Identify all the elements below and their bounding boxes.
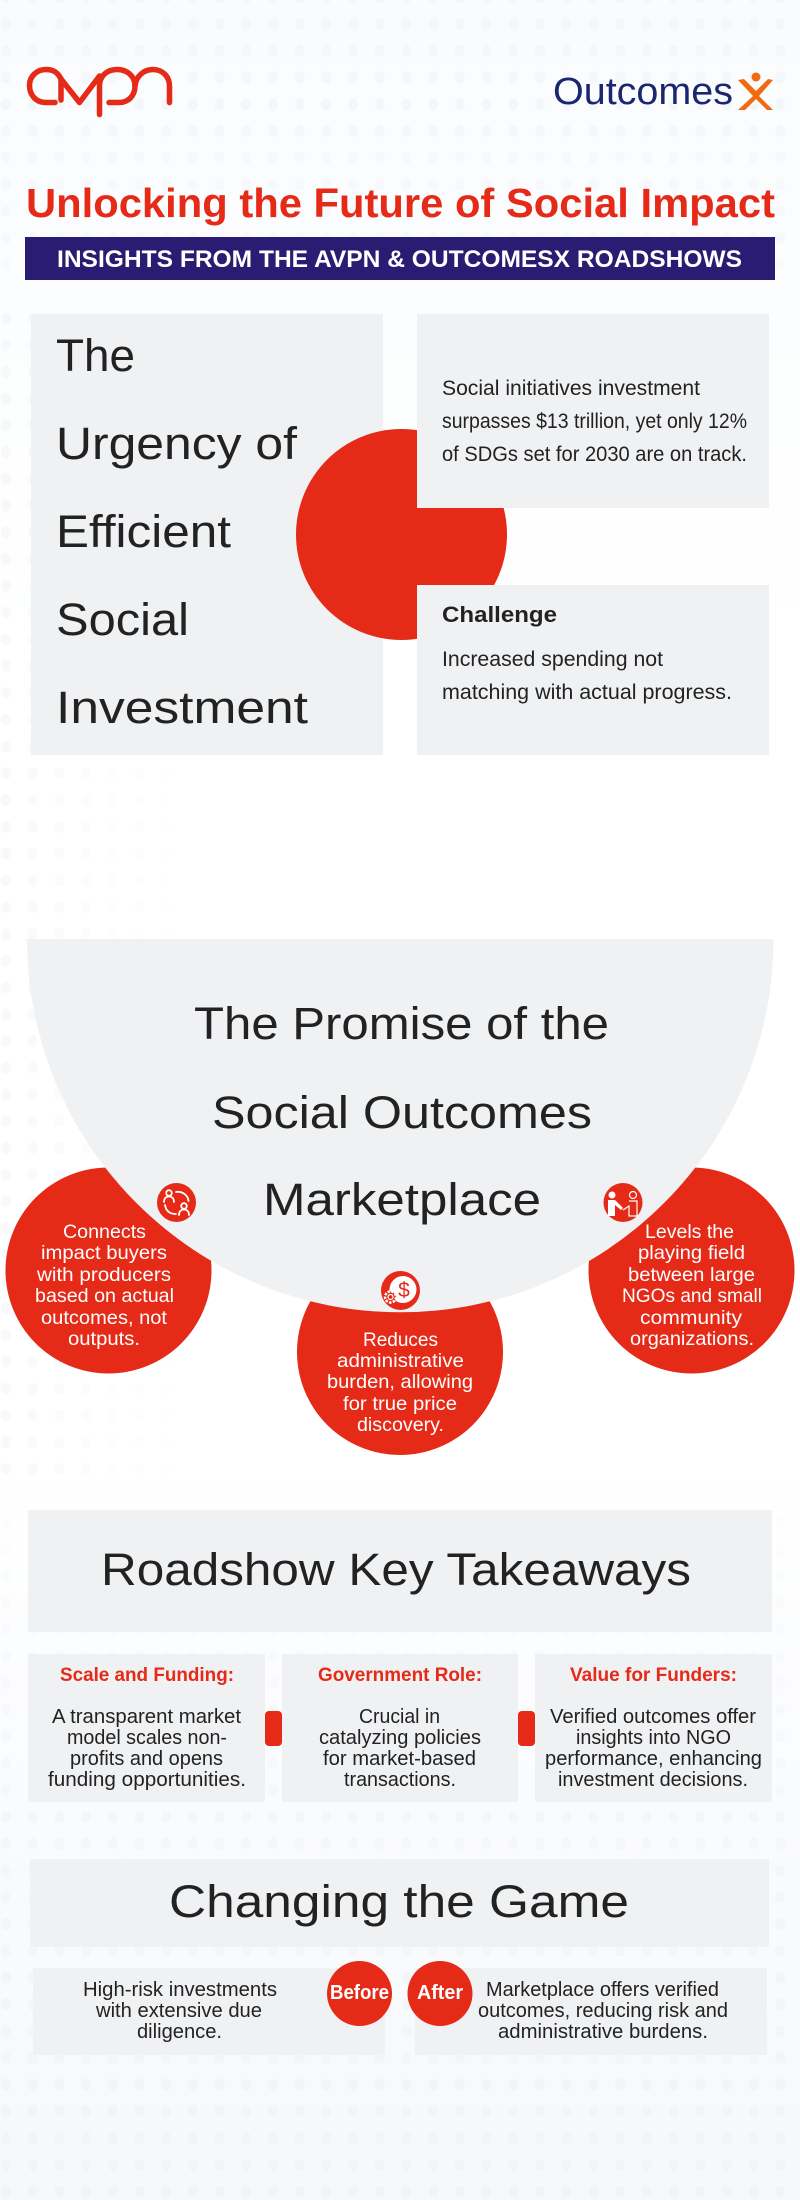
text: reduces burden: discovery. [357, 1414, 444, 1436]
text: reduces burden [327, 1329, 473, 1436]
text: connects buyers: outcomes, not [41, 1307, 168, 1329]
badge: after: After [417, 1982, 463, 2004]
icon: handshake [604, 1183, 642, 1222]
panel: challenge: matching with actual progress. [442, 681, 732, 704]
badge: before: Before [330, 1982, 389, 2004]
panel: before text [33, 1968, 385, 2055]
text: levels the field [622, 1221, 762, 1350]
panel: urgency heading: Investment [56, 682, 309, 733]
panel: challenge [417, 585, 769, 755]
panel: challenge: Increased spending not [442, 648, 663, 671]
card: scale and funding [28, 1654, 265, 1802]
panel: before text: High-risk investments [83, 1979, 277, 2001]
panel: before text: with extensive due [95, 2000, 262, 2022]
panel: urgency heading [31, 314, 383, 755]
text: levels the field: community [640, 1307, 742, 1329]
panel: promise semicircle heading: Marketplace [263, 1174, 541, 1225]
icon: dollar and gear [381, 1271, 420, 1310]
panel: investment fact: of SDGs set for 2030 are on track. [442, 443, 747, 466]
text: reduces burden: Reduces [363, 1329, 438, 1351]
card: value for funders [535, 1654, 772, 1802]
badge: before [327, 1961, 392, 2026]
card: scale and funding: model scales non- [67, 1727, 227, 1749]
text: connects buyers: based on actual [35, 1285, 174, 1307]
text: connects buyers: with producers [36, 1264, 171, 1286]
panel: investment fact [417, 314, 769, 508]
card: scale and funding: profits and opens [70, 1748, 223, 1770]
card: value for funders: Verified outcomes offer [550, 1706, 756, 1728]
red circle: left benefit [6, 1168, 212, 1374]
panel: key takeaways heading [28, 1510, 772, 1632]
panel: changing the game heading [30, 1859, 769, 1947]
panel: after text: outcomes, reducing risk and [478, 2000, 728, 2022]
card: government role: transactions. [344, 1769, 456, 1791]
text: levels the field: NGOs and small [622, 1285, 762, 1307]
subtitle banner: INSIGHTS FROM THE AVPN & OUTCOMESX ROADSHOWS [57, 246, 742, 273]
text: connects buyers: outputs. [68, 1328, 140, 1350]
text: levels the field: organizations. [630, 1328, 754, 1350]
panel: after text: administrative burdens. [498, 2021, 708, 2043]
panel: after text [415, 1968, 767, 2055]
text: connects buyers [35, 1221, 174, 1350]
logo: OutcomesX: Outcomes [553, 71, 733, 113]
panel: before text: diligence. [137, 2021, 222, 2043]
panel: urgency heading: Efficient [56, 506, 232, 557]
panel: promise semicircle heading: Social Outcomes [212, 1087, 592, 1138]
icon: dollar and gear: $ [398, 1279, 410, 1302]
card: government role: catalyzing policies [319, 1727, 481, 1749]
panel: challenge: Challenge [442, 602, 557, 627]
text: levels the field: Levels the [645, 1221, 734, 1243]
card: government role [282, 1654, 518, 1802]
text: levels the field: between large [628, 1264, 755, 1286]
red circle accent [296, 429, 507, 640]
red circle: middle benefit [297, 1249, 503, 1455]
panel: changing the game heading: Changing the Game [169, 1876, 629, 1927]
card: government role: Crucial in [359, 1706, 440, 1728]
logo: AVPN [30, 70, 170, 114]
panel: investment fact: Social initiatives investment [442, 377, 700, 400]
card: value for funders: Value for Funders: [570, 1664, 737, 1686]
card: scale and funding: A transparent market [52, 1706, 241, 1728]
panel: urgency heading: The [56, 330, 135, 381]
card: value for funders: investment decisions. [558, 1769, 748, 1791]
panel: after text: Marketplace offers verified [486, 1979, 719, 2001]
badge: after [408, 1961, 472, 2026]
card: scale and funding: Scale and Funding: [60, 1664, 234, 1686]
text: reduces burden: burden, allowing [327, 1371, 473, 1393]
title: Unlocking the Future of Social Impact [26, 180, 775, 226]
text: reduces burden: for true price [343, 1393, 457, 1415]
text: levels the field: playing field [638, 1242, 745, 1264]
card: scale and funding: funding opportunities. [48, 1769, 246, 1791]
card: government role: for market-based [323, 1748, 476, 1770]
panel: investment fact: surpasses $13 trillion, yet only 12% [442, 410, 747, 433]
icon: people exchange [157, 1183, 196, 1222]
text: reduces burden: administrative [337, 1350, 464, 1372]
panel: key takeaways heading: Roadshow Key Takeaways [101, 1544, 691, 1595]
panel: promise semicircle heading [27, 939, 774, 1312]
connector: cards one and two [265, 1711, 282, 1746]
text: connects buyers: Connects [63, 1221, 146, 1243]
panel: urgency heading: Urgency of [56, 418, 298, 469]
red circle: right benefit [588, 1168, 794, 1374]
panel: promise semicircle heading: The Promise of the [194, 998, 609, 1049]
card: value for funders: performance, enhancing [545, 1748, 762, 1770]
card: government role: Government Role: [318, 1664, 482, 1686]
panel: urgency heading: Social [56, 594, 189, 645]
text: connects buyers: impact buyers [41, 1242, 167, 1264]
card: value for funders: insights into NGO [576, 1727, 731, 1749]
connector: cards two and three [518, 1711, 535, 1746]
subtitle banner [25, 237, 775, 280]
